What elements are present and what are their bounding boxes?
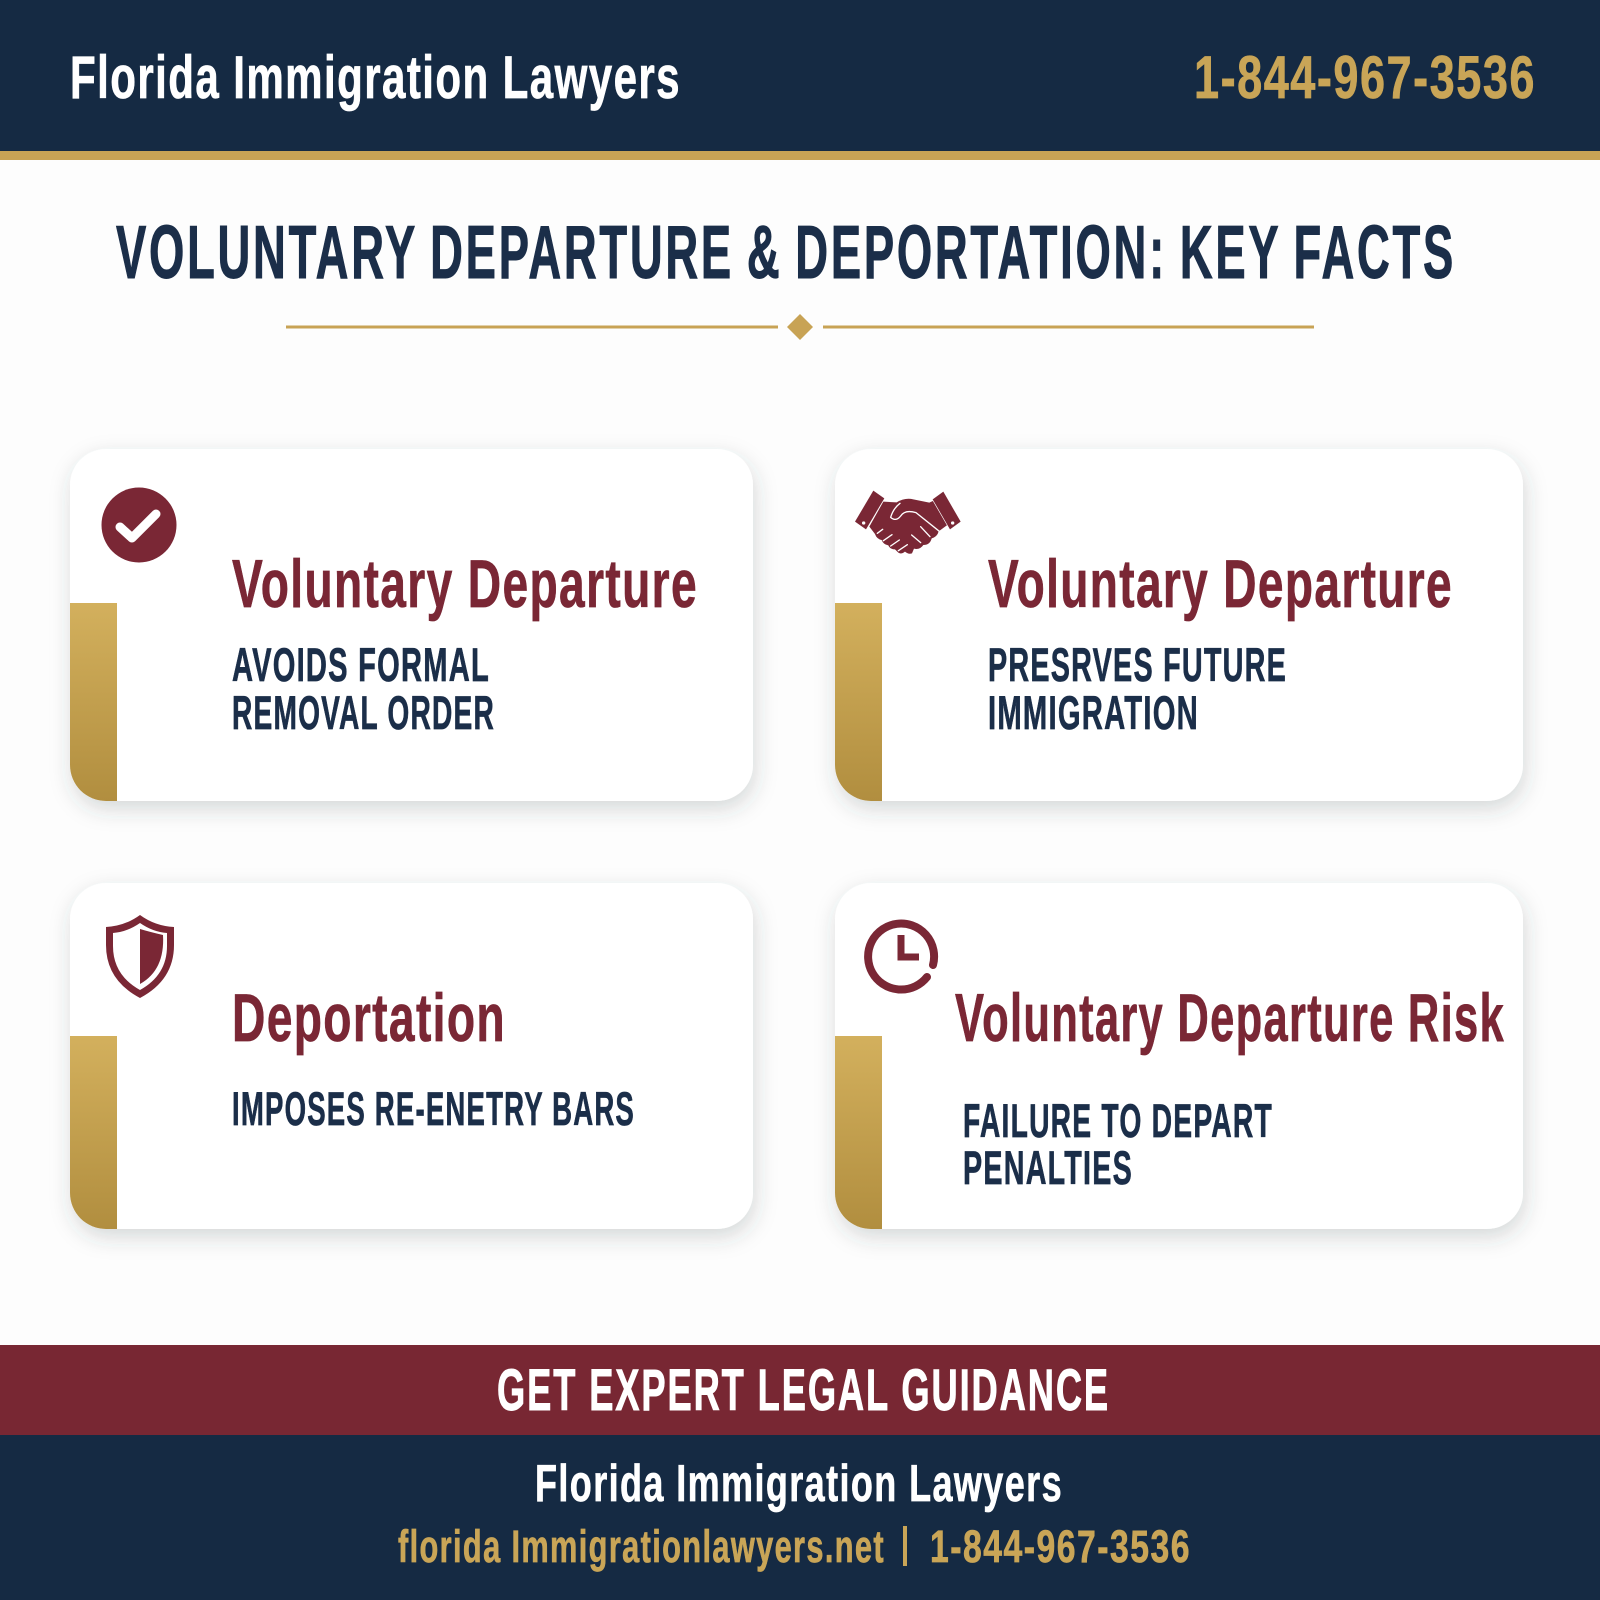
header bar — [0, 0, 1600, 160]
footer website and phone: florida Immigrationlawyers.net — [398, 1521, 885, 1572]
call to action band: GET EXPERT LEGAL GUIDANCE — [497, 1358, 1110, 1423]
card text: PENALTIES — [963, 1141, 1133, 1194]
panel: voluntary departure avoids removal order — [70, 449, 753, 801]
footer firm name: Florida Immigration Lawyers — [535, 1455, 1063, 1513]
card heading: Voluntary Departure — [232, 546, 698, 622]
icon: check circle — [102, 488, 176, 562]
title divider — [286, 314, 1314, 340]
card text: IMPOSES RE-ENETRY BARS — [232, 1082, 635, 1135]
call to action band — [0, 1345, 1600, 1436]
card text: REMOVAL ORDER — [232, 686, 495, 739]
card text: AVOIDS FORMAL — [232, 638, 490, 691]
card text — [232, 638, 495, 739]
panel: voluntary departure preserves future immigration — [835, 449, 1523, 801]
card text — [963, 1094, 1273, 1194]
header firm name: Florida Immigration Lawyers — [70, 44, 681, 111]
card text — [988, 638, 1287, 739]
card text: IMMIGRATION — [988, 686, 1199, 739]
icon: shield — [106, 915, 174, 998]
panel: deportation — [70, 883, 753, 1229]
icon: clock — [868, 924, 934, 990]
card text: PRESRVES FUTURE — [988, 638, 1287, 691]
panel: voluntary departure risk — [835, 883, 1523, 1229]
card text: FAILURE TO DEPART — [963, 1094, 1273, 1147]
icon: handshake — [855, 491, 961, 554]
card heading: Deportation — [232, 980, 506, 1056]
footer website and phone: 1-844-967-3536 — [930, 1521, 1191, 1572]
footer — [0, 1435, 1600, 1600]
